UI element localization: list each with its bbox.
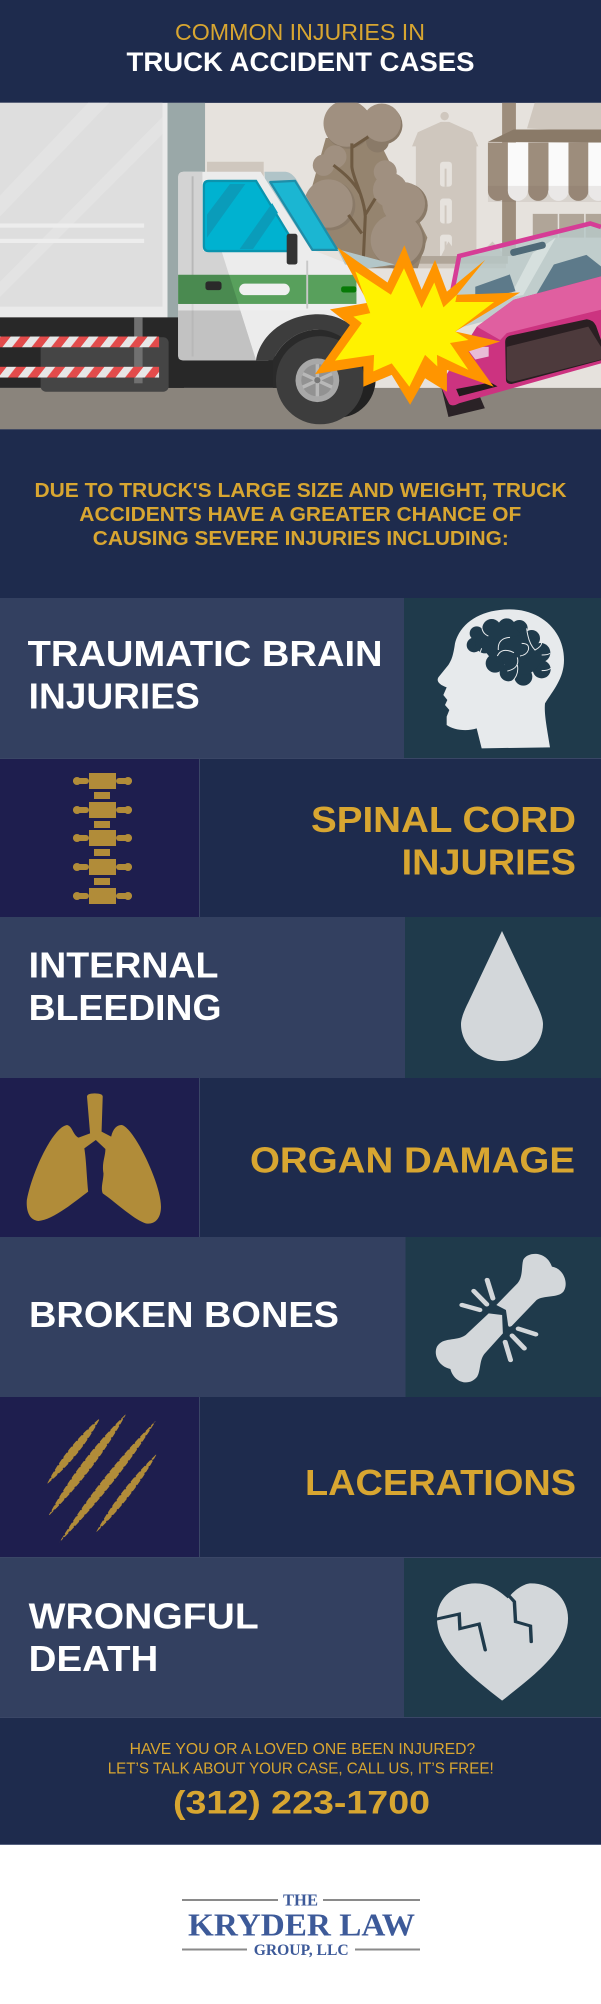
heading: wrongful death: DEATH: [29, 1638, 158, 1679]
call to action text: LET’S TALK ABOUT YOUR CASE, CALL US, IT’S FREE!: [108, 1760, 494, 1777]
call to action text: HAVE YOU OR A LOVED ONE BEEN INJURED?: [130, 1741, 475, 1758]
fence: [440, 242, 495, 256]
icon: head with brain: [438, 609, 564, 748]
panel: traumatic brain injuries: [0, 598, 601, 758]
truck box: [0, 103, 205, 318]
heading: internal bleeding: [29, 945, 222, 1028]
footer panel with logo: [0, 1844, 601, 2004]
icon: claw slashes: [47, 1413, 157, 1542]
title: TRUCK ACCIDENT CASES: [126, 47, 474, 77]
icon: spine: [73, 773, 132, 904]
icon: lungs: [27, 1093, 161, 1224]
heading: internal bleeding: BLEEDING: [29, 987, 222, 1028]
heading: broken bones: BROKEN BONES: [29, 1294, 339, 1335]
panel: internal bleeding: [0, 917, 601, 1078]
front wheel: [256, 314, 376, 424]
storefront: [488, 103, 601, 266]
heading: organ damage: ORGAN DAMAGE: [250, 1140, 575, 1181]
chassis and bumper stripes: [0, 317, 299, 392]
heading: lacerations: LACERATIONS: [305, 1462, 576, 1503]
pink car: [440, 222, 601, 417]
heading: wrongful death: [29, 1596, 259, 1679]
panel: wrongful death: [0, 1557, 601, 1717]
call to action: [0, 1717, 601, 1820]
collision burst: [315, 245, 520, 405]
intro text: CAUSING SEVERE INJURIES INCLUDING:: [93, 527, 509, 550]
heading: wrongful death: WRONGFUL: [29, 1596, 259, 1637]
illustration: truck colliding with pink car: [0, 100, 601, 429]
truck cab: [178, 172, 395, 360]
icon: cracked heart: [435, 1583, 568, 1701]
heading: traumatic brain injuries: INJURIES: [29, 676, 200, 717]
phone number: (312) 223-1700: [173, 1784, 430, 1820]
intro text: DUE TO TRUCK'S LARGE SIZE AND WEIGHT, TRUCK: [34, 479, 567, 502]
heading: internal bleeding: INTERNAL: [29, 945, 219, 986]
logo: The Kryder Law Group, LLC: GROUP, LLC: [254, 1942, 349, 1959]
heading: spinal cord injuries: [311, 799, 576, 883]
logo: The Kryder Law Group, LLC: THE: [283, 1891, 318, 1910]
icon: blood drop: [461, 931, 543, 1061]
heading: traumatic brain injuries: [28, 633, 383, 717]
panel: organ damage: [0, 1078, 575, 1237]
logo: The Kryder Law Group, LLC: [182, 1891, 420, 1959]
panel: spinal cord injuries: [0, 758, 601, 917]
panel: broken bones: [0, 1237, 601, 1397]
tree: [304, 100, 428, 269]
heading: spinal cord injuries: SPINAL CORD: [311, 799, 576, 840]
icon: broken bone: [436, 1254, 566, 1382]
intro text: [34, 479, 567, 550]
title: COMMON INJURIES IN: [175, 19, 425, 45]
background tower: [207, 112, 478, 268]
heading: spinal cord injuries: INJURIES: [402, 842, 576, 883]
title: [126, 19, 474, 77]
panel: lacerations: [0, 1397, 576, 1557]
logo: The Kryder Law Group, LLC: KRYDER LAW: [188, 1907, 415, 1943]
heading: traumatic brain injuries: TRAUMATIC BRAIN: [28, 633, 383, 674]
call to action text: [108, 1741, 494, 1777]
intro text: ACCIDENTS HAVE A GREATER CHANCE OF: [79, 503, 521, 526]
